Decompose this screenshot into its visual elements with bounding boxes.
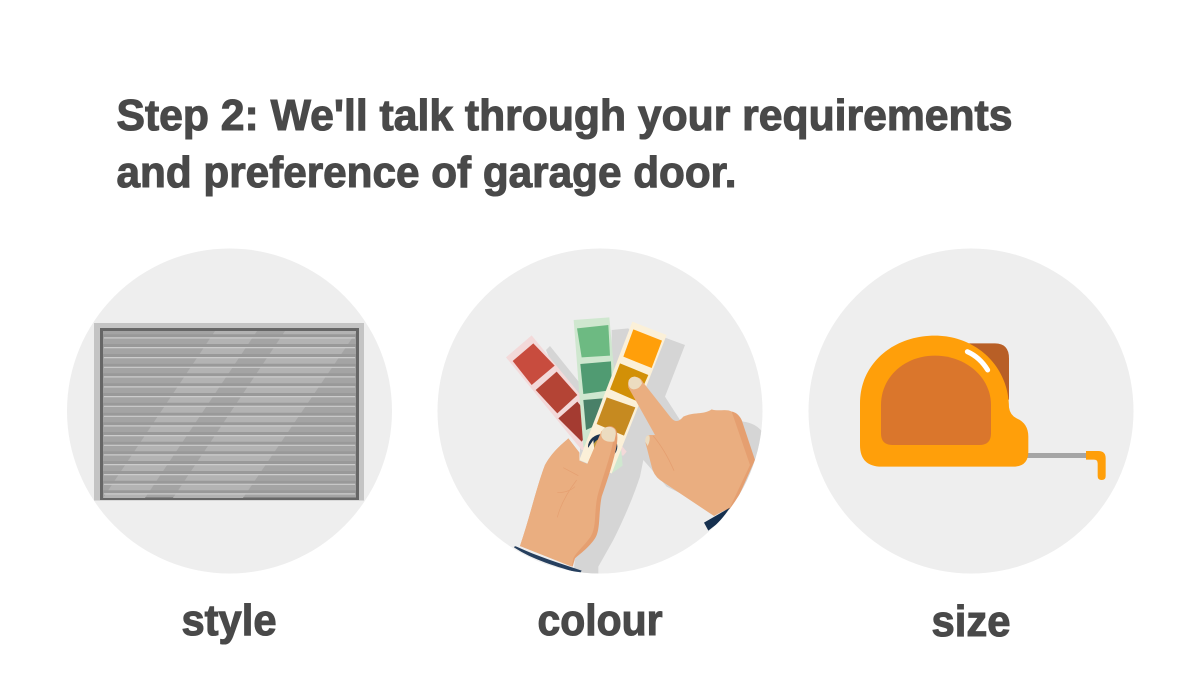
yellow swatch strip: [579, 322, 667, 473]
red swatch strip: [506, 335, 627, 456]
title: and preference of garage door.: [116, 148, 736, 197]
panel: colour: [438, 248, 763, 577]
icon: tape measure: [860, 336, 1106, 480]
left hand: [520, 426, 617, 567]
right hand: [628, 377, 755, 516]
panel: style: [67, 248, 392, 574]
infographic canvas: [67, 98, 1134, 644]
right cuff: [704, 508, 730, 531]
icon: hands holding colour swatch fan: [506, 317, 763, 577]
style background circle: [67, 248, 392, 574]
label: style: style: [182, 596, 276, 645]
title: [116, 91, 1012, 197]
size background circle: [808, 248, 1134, 574]
green swatch strip: [574, 317, 623, 473]
icon: garage door: [94, 323, 364, 500]
label: size: size: [932, 597, 1010, 646]
label: colour: colour: [538, 596, 662, 645]
left cuff: [514, 546, 582, 573]
title: Step 2: We'll talk through your requirements: [116, 91, 1012, 140]
panel: size: [808, 248, 1134, 574]
colour background circle: [438, 248, 762, 574]
